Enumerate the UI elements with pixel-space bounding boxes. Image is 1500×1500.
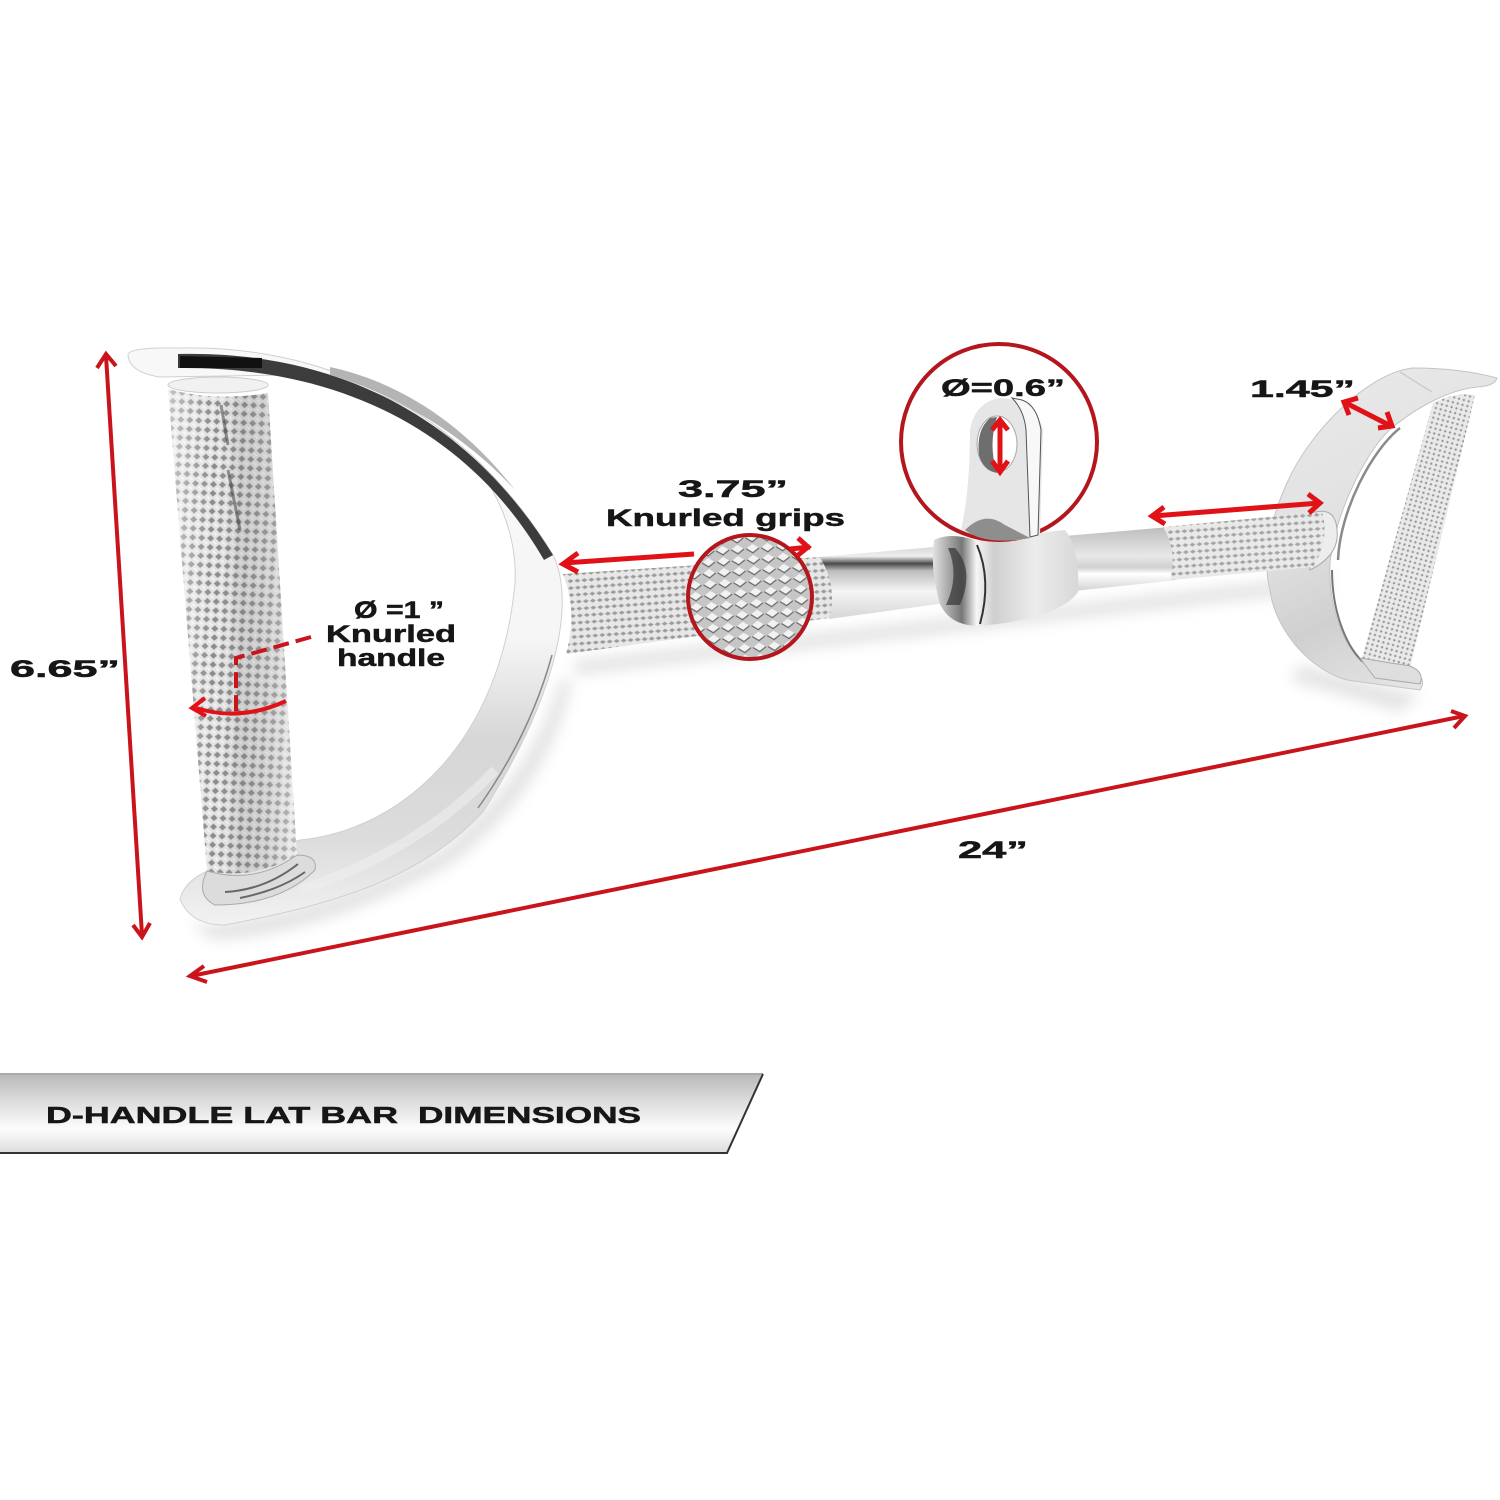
arrow: handle circumference with dashed leader xyxy=(192,637,311,716)
left knurled grip xyxy=(563,557,832,654)
arrow: overall height 6.65 xyxy=(97,354,150,937)
soft drop shadows xyxy=(190,575,1420,940)
right knurled grip xyxy=(1163,511,1337,580)
center bar right segment xyxy=(1064,527,1178,592)
label: 3.75 inches: 3.75” xyxy=(678,476,788,503)
arrow: overall length 24 xyxy=(190,711,1465,982)
banner title xyxy=(46,1102,641,1128)
banner xyxy=(0,1074,763,1153)
label: 24 inches: 24” xyxy=(958,837,1028,864)
arrow: knurled grip length xyxy=(563,538,810,572)
left knurled handle xyxy=(168,377,315,905)
arrow: eyelet hole diameter xyxy=(992,420,1008,472)
banner title: DIMENSIONS xyxy=(418,1102,641,1128)
arrow: right knurled grip xyxy=(1152,494,1320,524)
eyelet lug xyxy=(961,398,1043,541)
label: knurled: Knurled xyxy=(326,621,456,648)
right D plate xyxy=(1267,368,1497,690)
right knurled handle xyxy=(1360,394,1475,684)
left D plate xyxy=(128,348,562,925)
center bar left segment xyxy=(818,546,946,619)
label: handle: handle xyxy=(337,645,445,672)
knurl magnifier xyxy=(688,535,812,659)
eyelet magnifier xyxy=(901,344,1097,541)
label: handle diameter: Ø =1 ” xyxy=(354,597,444,624)
banner title: D-HANDLE LAT BAR xyxy=(46,1102,399,1128)
label: eyelet diameter: Ø=0.6” xyxy=(941,375,1065,402)
label: 6.65 inches: 6.65” xyxy=(10,656,120,683)
arrow: plate width 1.45 xyxy=(1344,398,1392,428)
banner ribbon xyxy=(0,1074,763,1153)
product: D-handle lat bar xyxy=(128,344,1497,940)
label: 1.45 inches: 1.45” xyxy=(1250,376,1355,403)
swivel collar xyxy=(933,530,1078,626)
label: knurled grips: Knurled grips xyxy=(606,505,845,532)
